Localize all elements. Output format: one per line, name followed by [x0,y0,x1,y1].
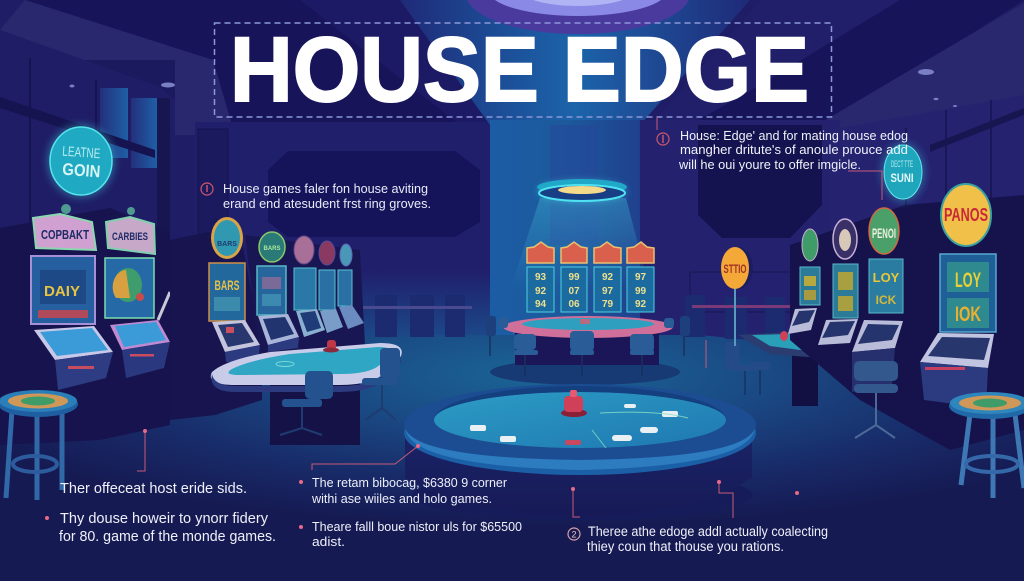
felt markings [470,404,678,445]
machine 2 right [852,208,903,392]
text: top right note: mangher dritute's of anoule prouce add [680,142,908,157]
text: bottom middle notes: The retam bibocag, $6380 9 corner [312,475,508,490]
machine 2 right: PENOI [872,225,896,241]
connector lines [137,117,882,518]
text: bottom right note: Theree athe edoge addl actually coalecting [588,524,828,539]
title frame [214,23,832,117]
lever [158,292,170,320]
icon: note marker top right [657,133,669,145]
right chair [854,361,898,393]
text: bottom middle notes: Theare falll boue nistor uls for $65500 [312,519,522,534]
left wall with windows [0,30,175,398]
text: bottom middle notes: withi ase wiiles and holo games. [311,491,492,506]
panel numbers: 06 [568,299,580,310]
text: bottom left notes [45,481,276,545]
background seating [362,295,792,339]
console [110,320,170,350]
text: bottom right note [587,524,828,554]
floor [0,335,1024,581]
machine 4 [257,232,299,352]
back table chairs [486,316,690,355]
title: HOUSE EDGE [230,19,809,121]
text: bottom right note: thiey coun that thouse you rations. [587,539,784,554]
light cone and ring lamp [510,179,650,290]
machine 5 [294,236,325,337]
ceiling panels [0,0,1024,135]
machine 1 right: PANOS [944,205,988,225]
number panels [527,267,654,312]
text: bottom left notes: Thy douse howeir to ynorr fidery [60,511,269,527]
panel numbers [535,272,646,310]
left slot machine 1 [31,204,113,390]
text: left note [223,181,431,211]
icon: note marker left [201,183,213,195]
center column [400,0,750,335]
machine 3: BARS [217,241,237,248]
orange sign [721,247,753,346]
right machine row [788,184,1024,450]
text: left note: erand end atesudent frst ring groves. [223,196,431,211]
text: bottom middle notes [299,475,522,549]
ceiling spotlights [70,69,957,107]
panel numbers: 99 [635,286,646,297]
text: top right note: will he oui youre to offer imgicle. [678,157,861,172]
door [198,129,228,259]
dark panel left [268,151,480,237]
red chip stack [561,390,587,417]
text: bottom left notes: Ther offeceat host eride sids. [60,481,247,497]
right neon sign: SUNI [890,171,914,185]
machine row left [170,217,365,420]
panel numbers: 79 [602,299,613,310]
panel numbers: 93 [535,272,546,283]
left slot machine 1: COPBAKT [41,227,89,242]
panel toppers [527,242,654,263]
panel numbers: 07 [568,286,580,297]
machine 4: BARS [263,246,281,252]
connector dots [143,429,799,495]
machine 1 right: LOY [955,269,981,292]
machine 7 [338,244,364,329]
console [34,326,113,360]
topper sign [33,214,96,250]
icon: note marker bottom right: 2 [571,530,577,540]
dark cabinet mass left [0,208,170,445]
chairs [725,342,770,371]
text: left note: House games faler fon house aviting [223,181,428,196]
right neon sign: DECT TTE [891,159,913,169]
right wall [640,95,1024,420]
panel numbers: 97 [635,272,646,283]
base [55,352,113,390]
text: bottom left notes: for 80. game of the monde games. [59,529,276,545]
text: bottom middle notes: adist. [312,534,345,549]
text: top right note [678,128,908,172]
game panels wall [527,242,654,312]
left slot machine 1: DAIY [44,283,80,300]
panel numbers: 94 [535,299,546,310]
left slot machine 2 [105,207,170,378]
machine 3 [209,217,260,362]
screen [31,256,95,324]
left slot machine 2: CARBIES [112,231,148,243]
machine 1 right [920,184,996,408]
back wall [195,122,495,272]
central round table [404,384,756,520]
machine 3 right [818,219,858,345]
machine 2 right: ICK [876,293,897,307]
panel numbers: 99 [568,272,580,283]
machine 4 right [788,229,820,334]
machine 3: BARS [214,277,240,293]
left neon sign [47,124,115,198]
machine 2 right: LOY [873,270,900,285]
panel numbers: 97 [602,286,613,297]
left neon sign: GOIN [62,160,101,181]
right neon sign [881,142,925,202]
chairs [282,348,400,407]
panel numbers: 92 [535,286,546,297]
ceiling lamp [466,0,690,34]
panel numbers: 92 [602,272,613,283]
orange sign: STTIO [724,262,746,276]
right gaming table [725,331,842,406]
text: top right note: House: Edge' and for mating house edog [680,128,908,143]
left stool [0,390,78,500]
screen [105,258,154,318]
back round table [486,316,690,385]
left gaming table [211,340,402,445]
machine 6 [319,241,343,333]
left neon sign: LEATNE [62,143,101,161]
icon: note marker bottom right [568,528,580,540]
right stool [949,392,1024,498]
panel numbers: 92 [635,299,646,310]
machine 1 right: IOK [955,303,981,326]
